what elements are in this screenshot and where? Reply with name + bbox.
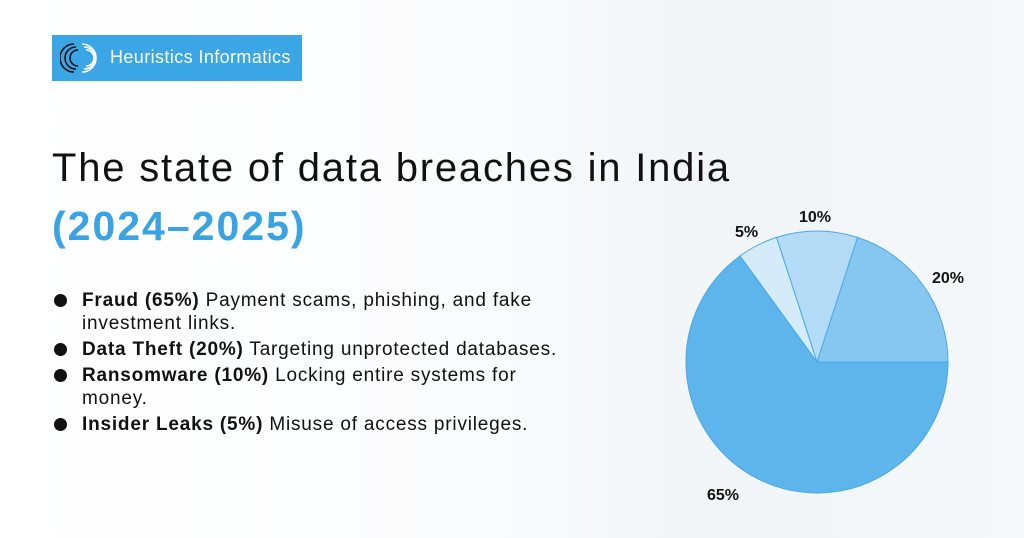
bullet list: Data Theft (20%) Targeting unprotected databases. [82, 339, 557, 360]
bullet list: Fraud (65%) Payment scams, phishing, and fake investment links. [82, 290, 532, 334]
subtitle year: (2024–2025) [52, 203, 307, 249]
pie chart: 20% [932, 270, 964, 287]
pie chart: 10% [799, 209, 831, 226]
title: The state of data breaches in India [52, 146, 731, 190]
pie chart: 65% [707, 487, 739, 504]
bullet list: Insider Leaks (5%) Misuse of access privileges. [82, 414, 528, 435]
icon: logo rings [60, 43, 97, 73]
pie chart: 5% [735, 224, 758, 241]
bullet list: Ransomware (10%) Locking entire systems for money. [82, 365, 517, 409]
logo: Heuristics Informatics [110, 47, 291, 67]
bullet list [54, 290, 557, 435]
logo [52, 35, 302, 81]
